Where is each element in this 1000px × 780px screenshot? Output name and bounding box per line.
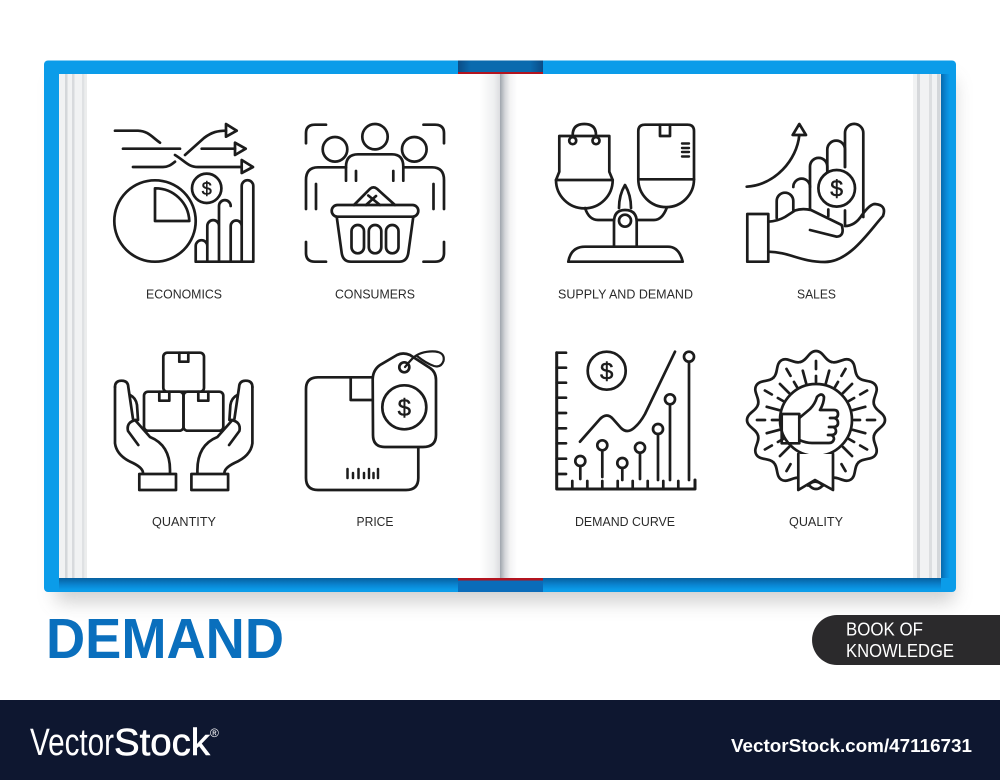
- bottom cover band: [59, 578, 941, 592]
- icon: economics: [114, 124, 253, 262]
- icon: price: $: [398, 395, 411, 422]
- footer image id: VectorStock.com/47116731: [731, 736, 972, 756]
- icon: supply and demand: [556, 124, 694, 262]
- open book: [44, 60, 956, 592]
- icon: consumers: [306, 124, 444, 262]
- icon: sales: [747, 124, 884, 262]
- icon: sales: $: [830, 176, 843, 202]
- label: consumers: CONSUMERS: [335, 288, 415, 302]
- footer logo bold part: Stock: [114, 722, 211, 764]
- book shadow: [56, 80, 954, 602]
- label: demand curve: DEMAND CURVE: [575, 515, 675, 529]
- label: economics: ECONOMICS: [146, 288, 222, 302]
- icon: economics: $: [202, 179, 212, 199]
- icon: demand curve: $: [600, 358, 613, 386]
- label: quality: QUALITY: [789, 515, 844, 529]
- icon: quantity: [115, 353, 252, 490]
- thumb up: [782, 414, 799, 443]
- footer bar: [0, 700, 1000, 780]
- rosette outline: [747, 351, 885, 489]
- ribbon: [798, 454, 833, 490]
- footer registered mark: ®: [210, 726, 219, 740]
- spine top: [458, 60, 543, 74]
- icon: demand curve: [557, 352, 695, 489]
- label: quantity: QUANTITY: [152, 515, 217, 529]
- label: sales: SALES: [797, 288, 836, 302]
- title: DEMAND: [46, 607, 284, 671]
- right cover strip: [941, 74, 950, 578]
- icon: quality: [747, 351, 885, 490]
- badge: book of knowledge: KNOWLEDGE: [846, 641, 954, 661]
- footer logo: Vector: [30, 722, 114, 764]
- icon: price: [306, 351, 444, 490]
- spine bottom: [458, 578, 543, 592]
- label: price: PRICE: [356, 515, 394, 529]
- badge: book of knowledge: [812, 615, 1000, 665]
- badge: book of knowledge: BOOK OF: [846, 620, 923, 640]
- pages: [59, 74, 941, 578]
- book cover: [44, 60, 956, 592]
- label: supply and demand: SUPPLY AND DEMAND: [558, 288, 693, 302]
